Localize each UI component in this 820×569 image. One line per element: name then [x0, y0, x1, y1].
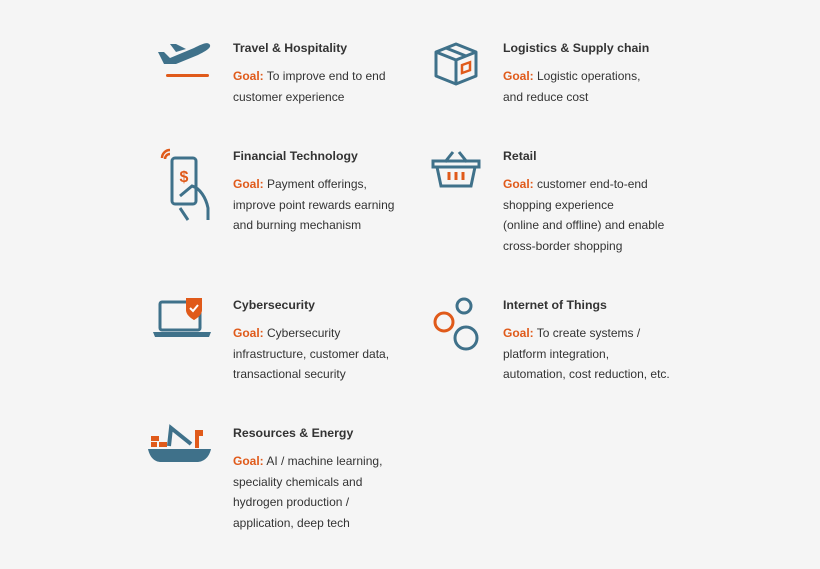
block: retail: shopping experience [503, 198, 614, 212]
block: retail [503, 149, 664, 252]
block: iot: Internet of Things [503, 298, 607, 312]
block: fintech: Financial Technology [233, 149, 358, 163]
block: fintech [233, 149, 394, 232]
block: travel: Travel & Hospitality [233, 41, 347, 55]
block: cybersecurity: infrastructure, customer data, [233, 346, 389, 360]
block: logistics: Logistics & Supply chain [503, 41, 649, 55]
block: logistics: and reduce cost [503, 90, 588, 104]
block: logistics: Goal: Logistic operations, [503, 69, 640, 83]
icon: basket [432, 151, 480, 188]
icon: ship [148, 424, 211, 462]
icon: IoT circles [434, 298, 478, 350]
block: iot [503, 298, 670, 381]
block: retail: Goal: customer end-to-end [503, 177, 648, 191]
block: retail: Retail [503, 149, 536, 163]
block: resources: application, deep tech [233, 516, 350, 530]
block: fintech: Goal: Payment offerings, [233, 177, 367, 191]
block: retail: (online and offline) and enable [503, 218, 664, 232]
block: travel: customer experience [233, 90, 344, 104]
icon: phone payment: $ [180, 169, 189, 186]
block: resources: hydrogen production / [233, 495, 349, 509]
block: resources: speciality chemicals and [233, 474, 362, 488]
block: travel [233, 41, 386, 104]
block: retail: cross-border shopping [503, 238, 622, 252]
block: resources: Resources & Energy [233, 426, 353, 440]
block: cybersecurity: transactional security [233, 367, 346, 381]
icon: phone payment [160, 148, 210, 221]
block: iot: platform integration, [503, 346, 609, 360]
block: logistics [503, 41, 649, 104]
block: cybersecurity: Goal: Cybersecurity [233, 326, 340, 340]
block: travel: Goal: To improve end to end [233, 69, 386, 83]
block: iot: Goal: To create systems / [503, 326, 640, 340]
block: resources [233, 426, 382, 530]
block: cybersecurity: Cybersecurity [233, 298, 315, 312]
block: fintech: and burning mechanism [233, 218, 361, 232]
block: cybersecurity [233, 298, 389, 381]
icon: box [434, 42, 478, 86]
block: fintech: improve point rewards earning [233, 198, 394, 212]
icon: laptop shield [153, 298, 211, 337]
block: resources: Goal: AI / machine learning, [233, 454, 382, 468]
block: iot: automation, cost reduction, etc. [503, 367, 670, 381]
icon: plane [158, 43, 210, 77]
